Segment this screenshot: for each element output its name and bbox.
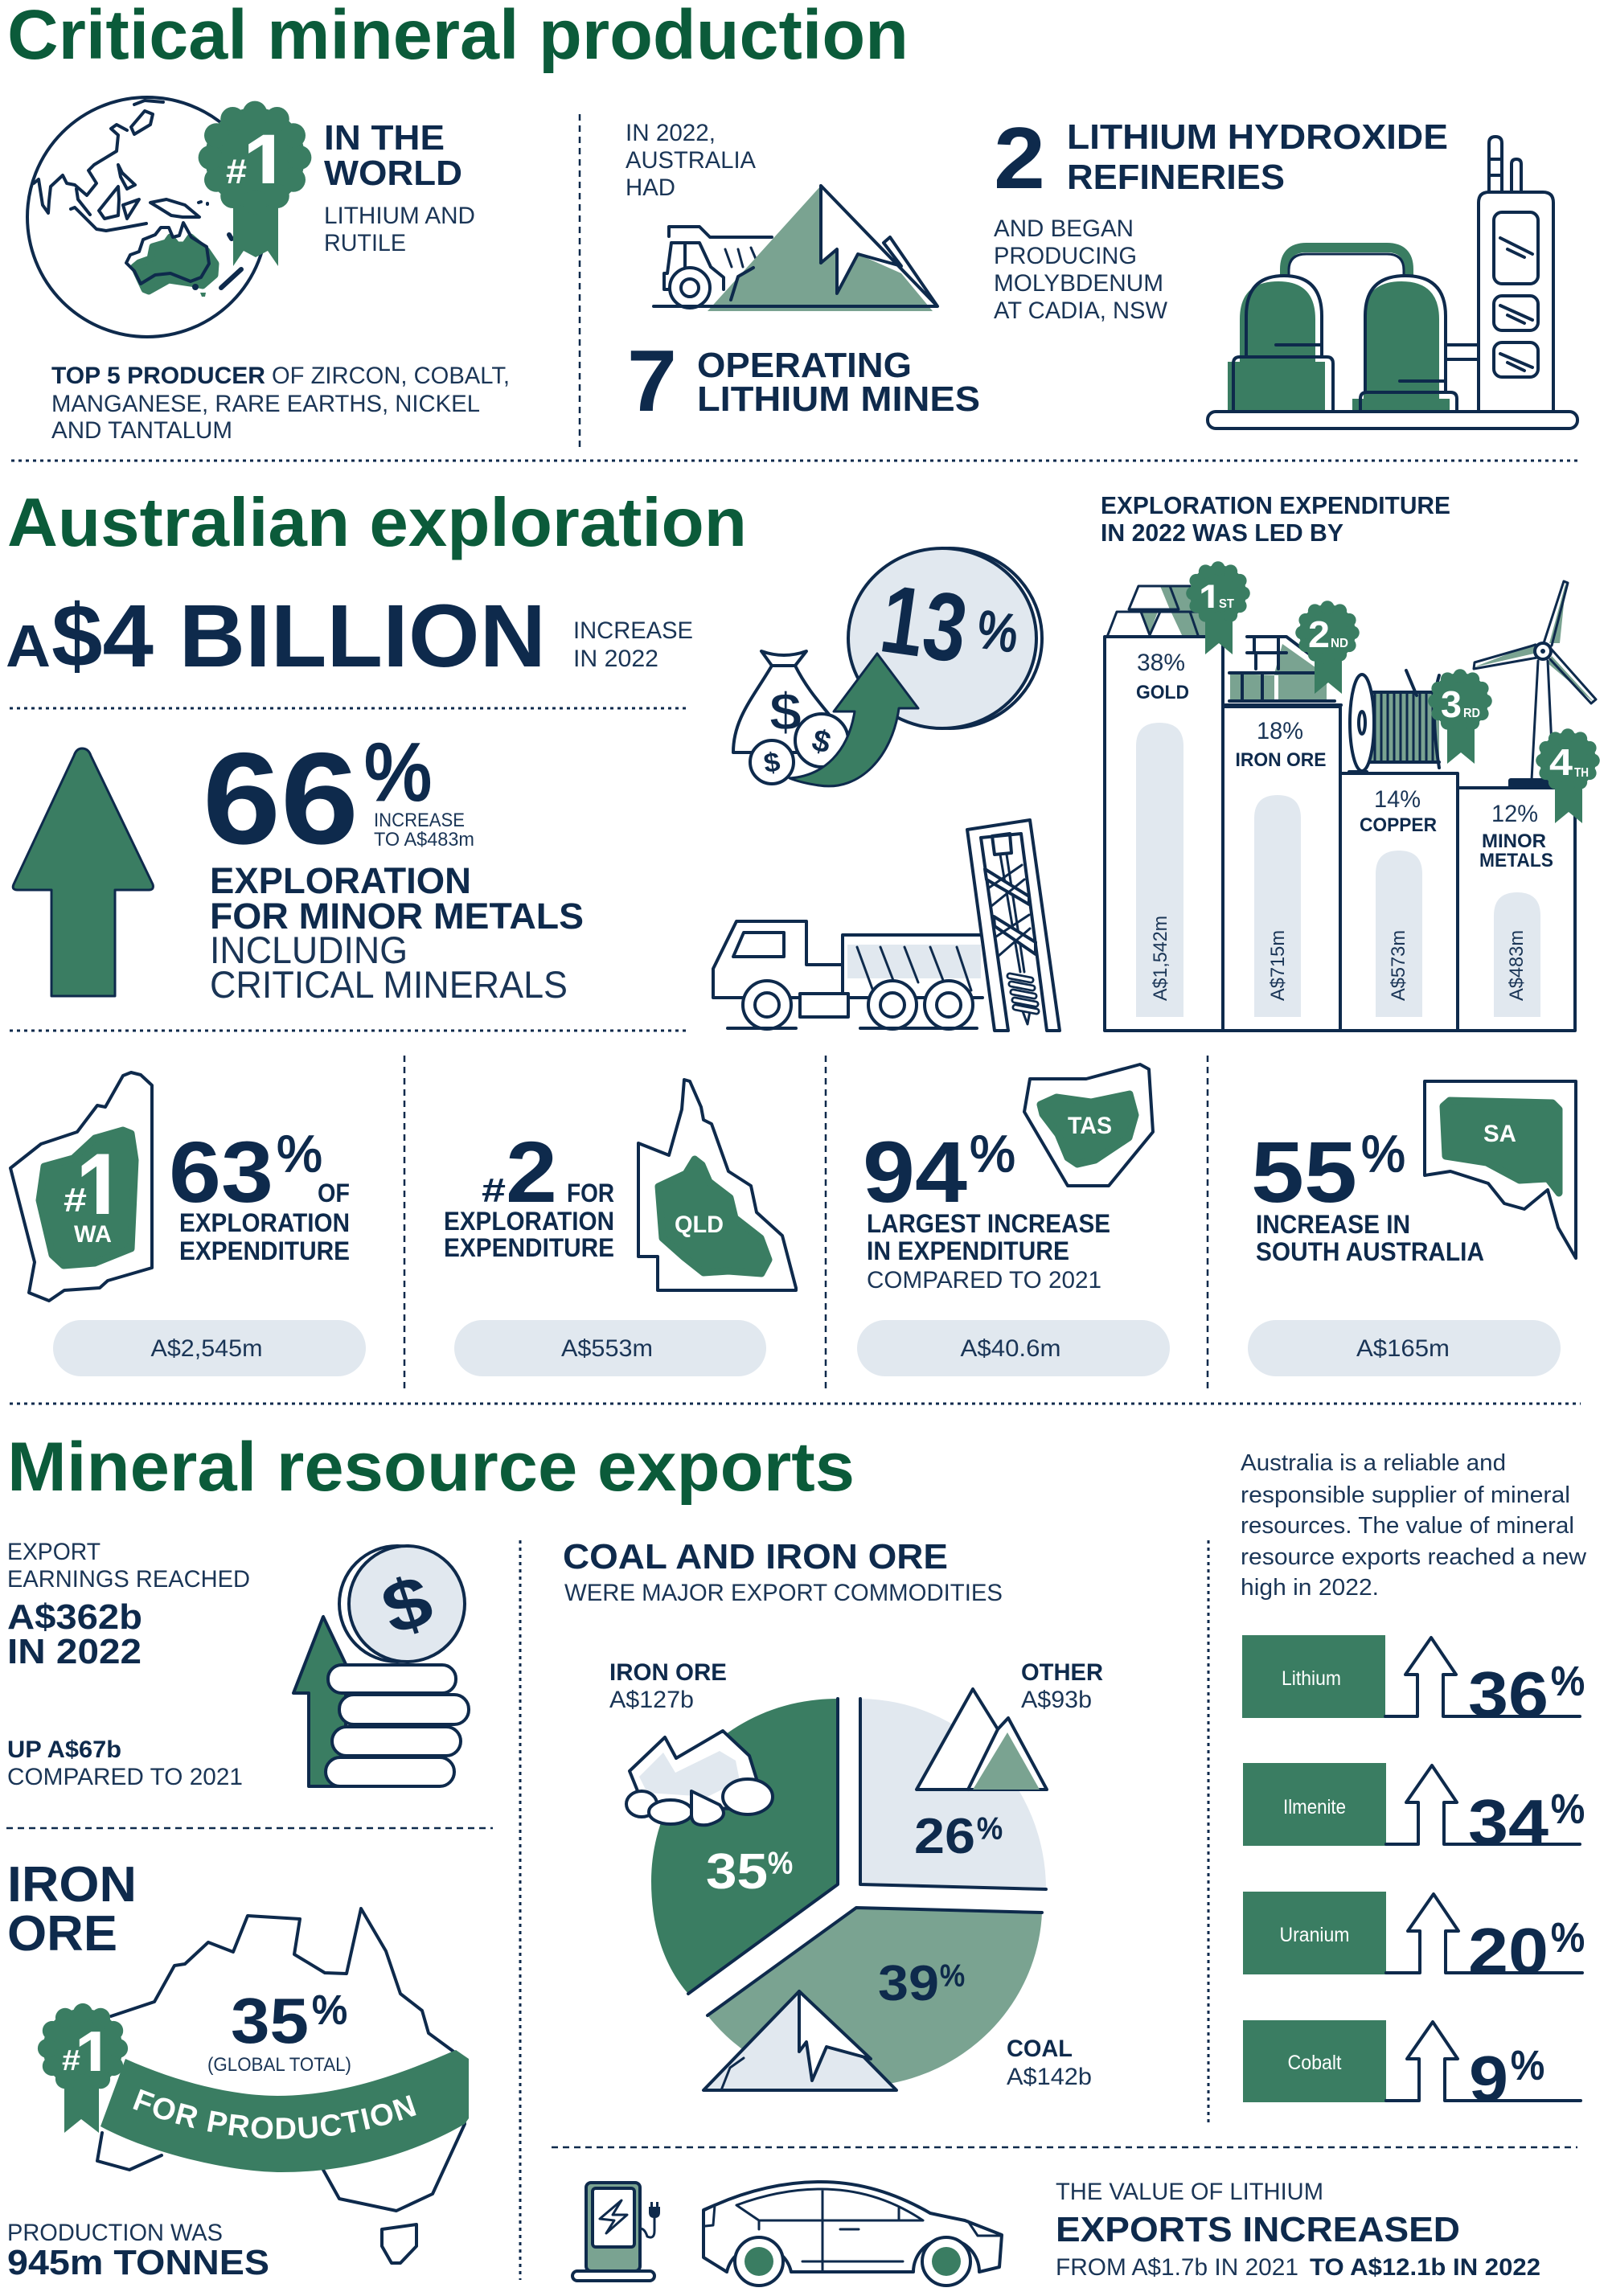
panel: export earnings [7, 1539, 469, 1790]
text: export earnings: EXPORT [7, 1539, 100, 1565]
row: ilmenite up 34%: Ilmenite [1283, 1796, 1346, 1818]
text: began producing molybdenum [994, 215, 1168, 324]
text: reliable supplier paragraph: resource exports reached a new [1241, 1544, 1587, 1570]
row: lithium up 36%: % [1551, 1658, 1585, 1704]
stat: 2 lithium hydroxide refineries [994, 109, 1448, 207]
text: export earnings: EARNINGS REACHED [7, 1566, 250, 1593]
text: value of lithium exports: EXPORTS INCREASED [1056, 2210, 1460, 2249]
stat: number 2 for exploration expenditure [444, 1123, 614, 1262]
text: value of lithium exports: THE VALUE OF LITHIUM [1056, 2179, 1323, 2205]
stat: A$4 billion: IN 2022 [573, 646, 658, 672]
column: iron ore 18%: 18% [1257, 718, 1303, 744]
icon: globe with Australia [27, 97, 267, 337]
row: uranium up 20%: 20 [1468, 1915, 1549, 1986]
label: coal A$142b: A$142b [1007, 2064, 1092, 2090]
pill: A$2,545m [53, 1320, 366, 1376]
text: reliable supplier paragraph: responsible supplier of mineral [1241, 1482, 1570, 1508]
banner: for production: FOR PRODUCTION [133, 2089, 416, 2139]
text: export earnings: A$362b [7, 1597, 142, 1637]
text: reliable supplier paragraph: Australia is a reliable and [1241, 1450, 1506, 1476]
icon: SA map [1425, 1081, 1576, 1258]
text: lithium and rutile: LITHIUM AND [324, 203, 475, 229]
panel: lithium hydroxide refineries [994, 109, 1577, 428]
icon: wind turbine [1474, 581, 1596, 789]
stat: 66 percent [203, 726, 474, 871]
stat: 94 percent [863, 1123, 1110, 1294]
stat: A$4 billion [6, 587, 693, 686]
label: other A$93b [1021, 1659, 1103, 1713]
text: in 2022 Australia had: HAD [626, 174, 675, 201]
row: cobalt up 9%: Cobalt [1288, 2052, 1342, 2074]
heading: exploration expenditure led by: IN 2022 WAS LED BY [1101, 519, 1343, 547]
badge: 1st [1186, 561, 1250, 654]
text: production was 945m tonnes: 945m TONNES [7, 2243, 269, 2282]
pie slice: coal 39% [708, 1908, 1042, 2087]
stat: number 2 for exploration expenditure: EXPLORATION [444, 1207, 614, 1236]
panel: 66 percent minor metals [13, 726, 584, 1006]
icon: money bag: $ [762, 747, 782, 779]
stat: 35 percent global: (GLOBAL TOTAL) [207, 2054, 351, 2076]
row: lithium up 36%: 36 [1468, 1658, 1549, 1730]
column: minor metals 12%: 12% [1491, 801, 1538, 827]
stat: pie labels: 35 [706, 1844, 768, 1900]
text: exploration for minor metals: EXPLORATION [210, 860, 471, 901]
icon: coal mountain [704, 1991, 896, 2090]
icon: SA map: SA [1483, 1121, 1516, 1147]
pie slice: other 26% [860, 1699, 1046, 1889]
column: iron ore 18%: IRON ORE [1235, 749, 1327, 771]
text: export earnings: UP A$67b [7, 1736, 121, 1763]
icon: iron ore rocks [626, 1731, 773, 1825]
stat: pie labels: 39 [878, 1956, 939, 2011]
column: minor metals 12%: METALS [1479, 850, 1553, 871]
panel: number one in the world [27, 97, 510, 444]
stat: 94 percent: % [970, 1125, 1015, 1183]
heading: in the world [324, 118, 462, 193]
text: began producing molybdenum: MOLYBDENUM [994, 270, 1163, 297]
pill: A$553m [454, 1320, 766, 1376]
text: lithium and rutile: RUTILE [324, 230, 406, 256]
heading: iron ore: IRON [7, 1857, 137, 1913]
row: uranium up 20% [1243, 1892, 1585, 1986]
icon: number one rosette: # [226, 152, 247, 191]
column: gold 38%: 38% [1137, 650, 1185, 676]
heading: coal and iron ore [563, 1537, 1003, 1606]
stat: 35 percent global [207, 1985, 351, 2076]
icon: money bag: $ [808, 724, 835, 761]
stat: pie labels: % [768, 1847, 793, 1880]
stat: 7 operating lithium mines: OPERATING [697, 346, 912, 385]
pie slice: iron ore 35% [651, 1699, 838, 1994]
column: minor metals 12%: A$483m [1506, 930, 1528, 1001]
row: cobalt up 9%: 9 [1469, 2043, 1508, 2114]
pill: A$553m: A$553m [561, 1335, 653, 1362]
row: uranium up 20%: % [1551, 1915, 1585, 1960]
text: reliable supplier paragraph: high in 2022. [1241, 1575, 1379, 1601]
stat: 94 percent: LARGEST INCREASE [867, 1209, 1110, 1238]
stat: 7 operating lithium mines: 7 [627, 332, 677, 430]
text: exploration for minor metals: CRITICAL MINERALS [210, 963, 568, 1006]
icon: electric car [704, 2182, 1002, 2286]
label: coal A$142b: COAL [1007, 2036, 1073, 2062]
icon: up arrow [13, 748, 153, 996]
stat: 66 percent: INCREASE [374, 810, 465, 831]
stat: 13 percent: 13 [875, 564, 974, 683]
row: lithium up 36% [1242, 1635, 1585, 1730]
stat: 13 percent: % [974, 599, 1022, 663]
icon: coin stack with arrow: $ [373, 1560, 442, 1650]
label: iron ore A$127b [609, 1659, 727, 1713]
icon: WA map: 1 [76, 1131, 125, 1248]
icon: mountain [654, 186, 937, 311]
icon: money bag [733, 651, 848, 784]
label: coal A$142b [1007, 2036, 1092, 2090]
text: began producing molybdenum: AT CADIA, NSW [994, 297, 1168, 324]
banner: for production [100, 2050, 469, 2172]
column: copper 14% [1340, 773, 1458, 1031]
badge: 4th [1536, 728, 1600, 823]
text: export earnings [7, 1539, 250, 1790]
badge: number 1: # [62, 2044, 80, 2077]
icon: curved green arrow [790, 654, 918, 786]
stat: 66 percent: % [364, 728, 432, 818]
icon: TAS map [1024, 1064, 1153, 1186]
stat: 63 percent: OF [318, 1179, 350, 1207]
stat: 55 percent: % [1361, 1125, 1405, 1183]
badge: 1st: 1 [1199, 576, 1221, 621]
stat: 63 percent: EXPENDITURE [179, 1236, 350, 1265]
row: ilmenite up 34%: % [1551, 1786, 1585, 1831]
badge: 2nd [1295, 601, 1360, 694]
stat: 55 percent: SOUTH AUSTRALIA [1256, 1237, 1484, 1266]
icon: other mountains [917, 1689, 1047, 1790]
text: in 2022 Australia had: AUSTRALIA [626, 147, 756, 174]
icon: EV charger [572, 2183, 660, 2281]
text: top 5 producer: OF ZIRCON, COBALT, [272, 363, 510, 389]
icon: Australia outline [97, 1909, 465, 2263]
stat: 63 percent [169, 1123, 350, 1265]
heading: exploration expenditure led by [1101, 491, 1450, 547]
stat: 66 percent: 66 [203, 726, 359, 871]
text: top 5 producer: AND TANTALUM [51, 417, 232, 444]
text: reliable supplier paragraph [1241, 1450, 1587, 1601]
stat: number 2 for exploration expenditure: EXPENDITURE [444, 1233, 614, 1262]
text: in 2022 Australia had [626, 120, 756, 201]
stat: pie labels: % [940, 1959, 965, 1993]
label: iron ore A$127b: IRON ORE [609, 1659, 727, 1686]
text: production was 945m tonnes: PRODUCTION WAS [7, 2220, 223, 2246]
panel: 13 percent coin [713, 548, 1060, 1031]
stat: A$4 billion: INCREASE [573, 617, 693, 644]
pill: A$2,545m: A$2,545m [151, 1335, 262, 1362]
stat: 94 percent: COMPARED TO 2021 [867, 1267, 1101, 1294]
column: iron ore 18% [1223, 707, 1340, 1031]
heading: iron ore: ORE [7, 1906, 117, 1962]
column: minor metals 12%: MINOR [1482, 830, 1546, 852]
icon: iron beams [1225, 637, 1341, 705]
stat: 94 percent: 94 [863, 1123, 967, 1220]
heading: in the world: IN THE [324, 118, 445, 158]
text: value of lithium exports: FROM A$1.7b IN 2021 [1056, 2254, 1298, 2281]
stat: 94 percent: IN EXPENDITURE [867, 1236, 1069, 1265]
label: other A$93b: OTHER [1021, 1659, 1103, 1686]
icon: copper spool [1349, 670, 1439, 772]
badge: 3rd [1428, 669, 1492, 764]
badge: 3rd: 3 [1441, 683, 1462, 725]
badge: number 1 [38, 2003, 128, 2133]
stat: 63 percent: 63 [169, 1123, 273, 1220]
heading: exploration expenditure led by: EXPLORATION EXPENDITURE [1101, 491, 1450, 519]
stat: 2 lithium hydroxide refineries: 2 [994, 109, 1045, 207]
stat: number 2 for exploration expenditure: 2 [506, 1123, 557, 1220]
panel: South Australia [1248, 1081, 1576, 1376]
stat: pie labels [706, 1809, 1003, 2011]
icon: number one rosette: 1 [243, 117, 289, 211]
text: began producing molybdenum: PRODUCING [994, 243, 1137, 269]
icon: big coin [848, 548, 1042, 728]
stat: 63 percent: EXPLORATION [179, 1208, 350, 1237]
text: production was 945m tonnes [7, 2220, 269, 2282]
icon: QLD map: QLD [675, 1212, 724, 1238]
stat: 55 percent [1251, 1123, 1484, 1266]
text: top 5 producer: TOP 5 PRODUCER [51, 363, 265, 389]
text: exploration for minor metals: INCLUDING [210, 929, 408, 971]
text: reliable supplier paragraph: resources. The value of mineral [1241, 1513, 1574, 1539]
stat: 7 operating lithium mines [627, 332, 980, 430]
heading: in the world: WORLD [324, 154, 462, 193]
stat: number 2 for exploration expenditure: # [482, 1171, 506, 1209]
icon: drill truck [713, 820, 1060, 1031]
text: exploration for minor metals: FOR MINOR METALS [210, 896, 584, 937]
panel: Queensland [444, 1080, 796, 1376]
pill: A$40.6m: A$40.6m [960, 1335, 1061, 1362]
stat: 55 percent: 55 [1251, 1123, 1357, 1220]
icon: QLD map [638, 1080, 796, 1290]
text: export earnings: IN 2022 [7, 1632, 142, 1671]
stat: 2 lithium hydroxide refineries: LITHIUM HYDROXIDE [1067, 117, 1448, 157]
panel: exploration expenditure leaders [1101, 491, 1600, 1031]
panel: coal and iron ore pie [563, 1537, 1103, 2090]
badge: 1st: ST [1219, 597, 1234, 611]
stat: A$4 billion: A [6, 613, 51, 679]
stat: number 2 for exploration expenditure: FOR [567, 1179, 614, 1207]
icon: WA map: # [64, 1181, 87, 1219]
row: ilmenite up 34% [1243, 1763, 1585, 1858]
heading: iron ore [7, 1857, 137, 1962]
icon: WA map [10, 1072, 152, 1301]
pill: A$40.6m [857, 1320, 1170, 1376]
label: iron ore A$127b: A$127b [609, 1687, 694, 1713]
text: exploration for minor metals [210, 860, 584, 1006]
heading: Mineral resource exports: Mineral resource exports [7, 1429, 855, 1506]
column: gold 38% [1105, 637, 1223, 1031]
icon: money bag: $ [769, 682, 802, 741]
stat: pie labels: 26 [914, 1809, 975, 1864]
badge: 2nd: ND [1331, 637, 1348, 650]
label: other A$93b: A$93b [1021, 1687, 1092, 1713]
icon: TAS map: TAS [1068, 1113, 1112, 1139]
stat: 35 percent global: 35 [231, 1985, 309, 2056]
column: minor metals 12% [1458, 788, 1575, 1031]
stat: 55 percent: INCREASE IN [1256, 1210, 1410, 1239]
text: value of lithium exports [1056, 2179, 1540, 2281]
heading: coal and iron ore: COAL AND IRON ORE [563, 1537, 948, 1576]
column: gold 38%: GOLD [1136, 682, 1189, 703]
icon: refinery [1208, 137, 1577, 428]
heading: coal and iron ore: WERE MAJOR EXPORT COMMODITIES [564, 1580, 1003, 1606]
icon: haul truck [664, 227, 772, 308]
heading: Australian exploration: Australian exploration [7, 485, 747, 561]
stat: pie labels: % [977, 1812, 1003, 1846]
column: copper 14%: COPPER [1360, 814, 1437, 836]
text: lithium and rutile [324, 203, 475, 256]
badge: 3rd: RD [1463, 707, 1480, 720]
stat: 66 percent: TO A$483m [374, 829, 474, 851]
row: lithium up 36%: Lithium [1282, 1667, 1341, 1690]
panel: iron ore [7, 1857, 469, 2282]
icon: number one rosette [199, 101, 311, 266]
stat: A$4 billion: $4 BILLION [51, 587, 546, 686]
icon: coin stack with arrow [293, 1546, 469, 1786]
panel: Western Australia [10, 1072, 366, 1376]
stat: 63 percent: % [277, 1125, 322, 1183]
badge: 4th: TH [1574, 766, 1589, 780]
stat: 7 operating lithium mines: LITHIUM MINES [697, 379, 980, 419]
text: top 5 producer [51, 363, 510, 444]
badge: 4th: 4 [1549, 741, 1573, 783]
pill: A$165m: A$165m [1356, 1335, 1450, 1362]
stat: 2 lithium hydroxide refineries: REFINERIES [1067, 158, 1285, 197]
text: value of lithium exports: TO A$12.1b IN 2022 [1310, 2254, 1540, 2281]
row: cobalt up 9% [1243, 2020, 1581, 2114]
icon: gold bars [1107, 586, 1206, 637]
badge: 2nd: 2 [1308, 613, 1330, 655]
text: top 5 producer: MANGANESE, RARE EARTHS, NICKEL [51, 391, 480, 417]
column: iron ore 18%: A$715m [1267, 930, 1289, 1001]
panel: Tasmania [857, 1064, 1170, 1376]
stat: 35 percent global: % [312, 1987, 347, 2032]
column: gold 38%: A$1,542m [1150, 916, 1171, 1001]
icon: WA map: WA [74, 1221, 112, 1248]
row: ilmenite up 34%: 34 [1468, 1786, 1549, 1858]
pill: A$165m [1248, 1320, 1561, 1376]
text: export earnings: COMPARED TO 2021 [7, 1764, 243, 1790]
row: uranium up 20%: Uranium [1280, 1924, 1349, 1946]
text: began producing molybdenum: AND BEGAN [994, 215, 1134, 242]
column: copper 14%: A$573m [1388, 930, 1409, 1001]
panel: lithium mines [626, 120, 980, 430]
badge: number 1: 1 [75, 2018, 113, 2094]
column: copper 14%: 14% [1374, 786, 1421, 813]
row: cobalt up 9%: % [1511, 2043, 1544, 2088]
text: in 2022 Australia had: IN 2022, [626, 120, 716, 146]
